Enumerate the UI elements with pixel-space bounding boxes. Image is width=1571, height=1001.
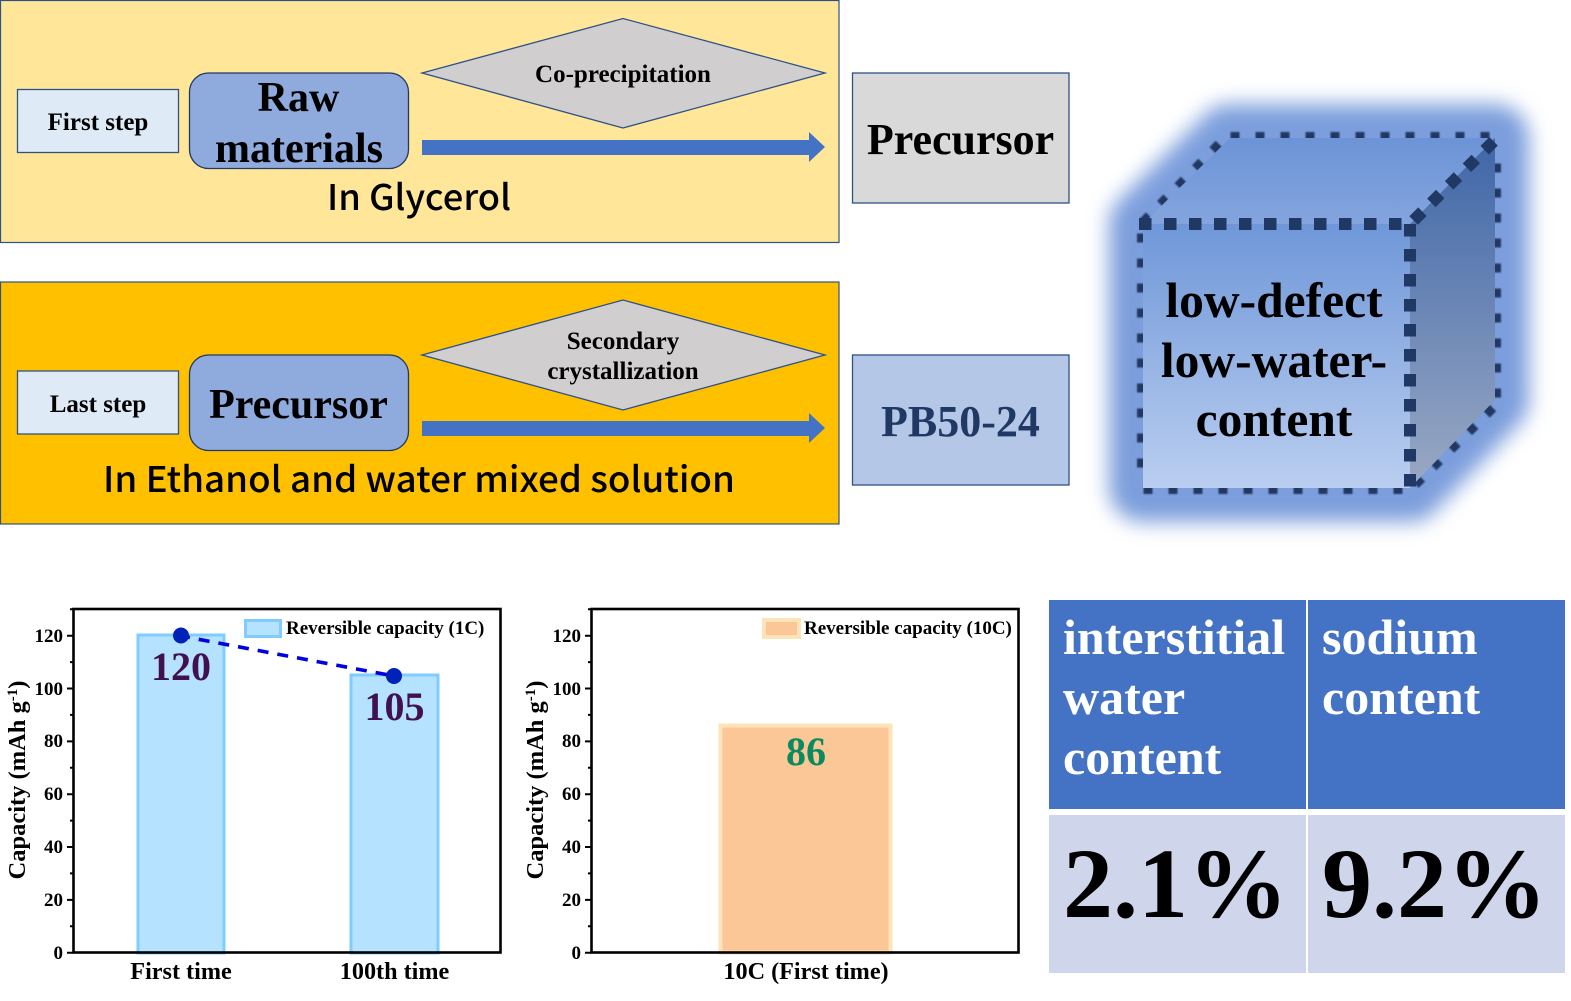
text: low-defect low-water-content: content [1196, 392, 1353, 447]
y tick labels: 100 [34, 679, 63, 700]
text: low-defect low-water-content: low-water- [1161, 333, 1387, 388]
arrow: last step [422, 413, 825, 443]
value: 2.1%: 2.1% [1063, 828, 1288, 939]
axis frame [67, 609, 500, 953]
value labels: 120 [151, 644, 211, 689]
y tick labels: 40 [562, 837, 581, 858]
diamond: secondary crystallization: crystallization [547, 358, 699, 385]
box: raw materials [190, 73, 408, 172]
y tick labels: 40 [44, 837, 63, 858]
bar [720, 726, 890, 952]
icon: cube [1139, 138, 1495, 488]
header: sodium content: sodium [1322, 609, 1478, 665]
x label: 10C (First time) [723, 958, 889, 985]
text: low-defect low-water-content: low-defect [1165, 273, 1383, 328]
diamond: secondary crystallization: Secondary [567, 328, 680, 355]
header: interstitial water content: interstitial [1063, 609, 1285, 665]
text: in ethanol and water: In Ethanol and water mixed solution [103, 452, 735, 503]
legend: Reversible capacity (10C) [804, 618, 1012, 639]
header: interstitial water content [1049, 600, 1306, 809]
box: precursor [190, 355, 408, 450]
y axis title: ) [522, 681, 549, 689]
y tick labels: 120 [552, 626, 581, 647]
y tick labels: 60 [44, 784, 63, 805]
legend: Reversible capacity (1C) [286, 618, 484, 639]
value label: 86 [786, 729, 826, 774]
header: interstitial water content: water [1063, 669, 1185, 725]
x labels: First time [130, 958, 232, 985]
y axis title: Capacity (mAh g [4, 701, 31, 879]
value: 2.1% [1049, 815, 1306, 973]
box: precursor: Precursor [209, 382, 388, 428]
label: first step [18, 90, 178, 152]
panel: first step in glycerol [0, 0, 839, 242]
y tick labels: 120 [34, 626, 63, 647]
value labels: 105 [364, 684, 424, 729]
box: PB50-24 [852, 355, 1069, 485]
label: last step: Last step [50, 391, 146, 418]
y tick labels [34, 626, 63, 964]
box: precursor result [852, 73, 1069, 203]
label: last step [18, 371, 178, 434]
label: first step: First step [48, 109, 148, 136]
box: PB50-24: PB50-24 [881, 397, 1040, 446]
y axis title: ) [4, 681, 31, 689]
header: sodium content [1308, 600, 1565, 809]
header: interstitial water content: content [1063, 729, 1222, 785]
y tick labels: 60 [562, 784, 581, 805]
diamond: secondary crystallization [422, 300, 825, 410]
text: low-defect low-water-content [1161, 273, 1387, 447]
y axis title: Capacity (mAh g [522, 701, 549, 879]
y tick labels [552, 626, 581, 964]
axis frame [585, 609, 1018, 953]
value: 9.2%: 9.2% [1322, 828, 1547, 939]
text: in glycerol: In Glycerol [327, 170, 511, 221]
box: raw materials: materials [215, 126, 383, 172]
box: raw materials: Raw [258, 75, 340, 121]
y tick labels: 80 [44, 731, 63, 752]
value labels [151, 644, 424, 729]
diamond: co-precipitation: Co-precipitation [535, 61, 711, 88]
y tick labels: 100 [552, 679, 581, 700]
bar chart: reversible capacity 1C [4, 609, 500, 985]
diamond: co-precipitation [422, 18, 825, 128]
table: water and sodium content [1049, 600, 1565, 973]
x labels: 100th time [340, 958, 450, 985]
y tick labels: 0 [572, 943, 581, 964]
panel: last step in ethanol and water [0, 282, 839, 524]
y tick labels: 80 [562, 731, 581, 752]
x labels [130, 958, 450, 985]
bar chart: reversible capacity 10C [522, 609, 1018, 985]
arrow: first step [422, 132, 825, 162]
bars [138, 635, 438, 953]
header: sodium content: content [1322, 669, 1481, 725]
value: 9.2% [1308, 815, 1565, 973]
y tick labels: 20 [44, 890, 63, 911]
y tick labels: 20 [562, 890, 581, 911]
y tick labels: 0 [54, 943, 63, 964]
box: precursor result: Precursor [867, 115, 1054, 164]
y axis title: -1 [5, 689, 21, 701]
y axis title: -1 [523, 689, 539, 701]
trend line [173, 628, 402, 684]
